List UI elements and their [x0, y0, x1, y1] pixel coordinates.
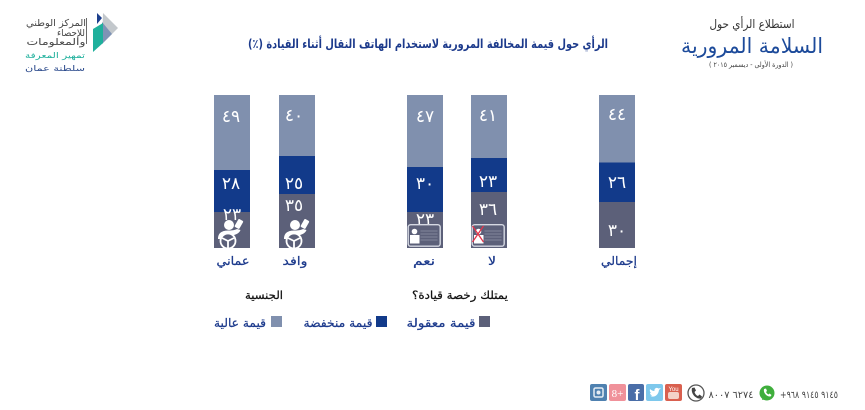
bar: total: ٢٦	[608, 173, 626, 193]
group label: nationality: الجنسية	[245, 288, 283, 302]
icon: google plus: 8+	[612, 388, 623, 400]
bar: Omani: ٢٣	[223, 205, 241, 225]
bar: no licence	[471, 95, 507, 268]
bar: Omani	[214, 95, 250, 268]
header: survey title: استطلاع الرأي حول	[710, 16, 794, 32]
bar: expatriate	[279, 95, 315, 269]
icon: youtube: You	[668, 387, 679, 393]
icon: whatsapp	[760, 386, 774, 400]
icon: driver using phone	[218, 219, 244, 248]
whatsapp number: +٩٦٨ ٩١٤٥ ٩١٤٥	[780, 390, 838, 401]
bar: expatriate: ٣٥	[285, 196, 303, 216]
icon: licence card crossed out	[472, 225, 504, 246]
legend: قيمة منخفضة	[304, 316, 372, 330]
header: survey title: السلامة المرورية	[681, 34, 823, 58]
bar: has licence	[407, 95, 443, 268]
logo: statistics centre: المركز الوطني	[26, 18, 86, 29]
logo: statistics centre	[25, 13, 118, 73]
icon: licence card	[408, 225, 440, 246]
logo: statistics centre: للإحصاء	[57, 28, 85, 39]
bar: expatriate: ٢٥	[285, 174, 303, 194]
bar: total: ٤٤	[608, 105, 626, 125]
icon: google plus	[609, 384, 626, 401]
chart title: الرأي حول قيمة المخالفة المرورية لاستخدام الهاتف النقال أثناء القيادة (٪)	[248, 35, 608, 52]
legend: قيمة عالية	[214, 316, 266, 330]
bar: Omani: ٤٩	[222, 107, 240, 127]
bar: no licence: ٣٦	[479, 200, 497, 220]
legend: قيمة معقولة	[406, 316, 476, 331]
icon: phone	[688, 385, 704, 401]
bar: Omani: عماني	[216, 254, 250, 268]
bar: expatriate: ٤٠	[285, 106, 303, 126]
bar: no licence: ٢٣	[479, 172, 497, 192]
bar: expatriate: وافد	[282, 254, 308, 269]
header: survey title	[681, 16, 823, 69]
bar: has licence: نعم	[413, 254, 435, 268]
logo: statistics centre: والمعلومات	[26, 37, 86, 48]
bar: Omani: ٢٨	[222, 174, 240, 194]
icon: twitter	[646, 384, 663, 401]
bar: has licence: ٤٧	[416, 107, 434, 127]
bar: total: ٣٠	[608, 221, 626, 241]
logo: statistics centre: سلطنة عمان	[25, 64, 85, 73]
bar: has licence: ٢٣	[416, 210, 434, 230]
icon: youtube	[665, 384, 682, 401]
bar: no licence: لا	[488, 254, 496, 268]
bar: no licence: ٤١	[479, 106, 497, 126]
phone number: ٨٠٠٧ ٦٢٧٤	[708, 390, 754, 401]
logo: statistics centre: تمهير المعرفة	[25, 51, 85, 60]
icon: facebook: f	[634, 387, 640, 404]
icon: facebook	[628, 384, 644, 404]
bar: total: إجمالي	[601, 254, 637, 268]
group label: licence: يمتلك رخصة قيادة؟	[412, 288, 508, 303]
icon: driver using phone	[284, 219, 310, 248]
header: survey title: ( الدورة الأولى - ديسمبر ٢٠١٥ )	[709, 60, 793, 69]
bar: has licence: ٣٠	[416, 174, 434, 194]
footer: contact and social icons	[590, 384, 838, 404]
bar: total	[599, 95, 637, 268]
icon: instagram	[590, 384, 607, 401]
legend	[214, 316, 490, 331]
